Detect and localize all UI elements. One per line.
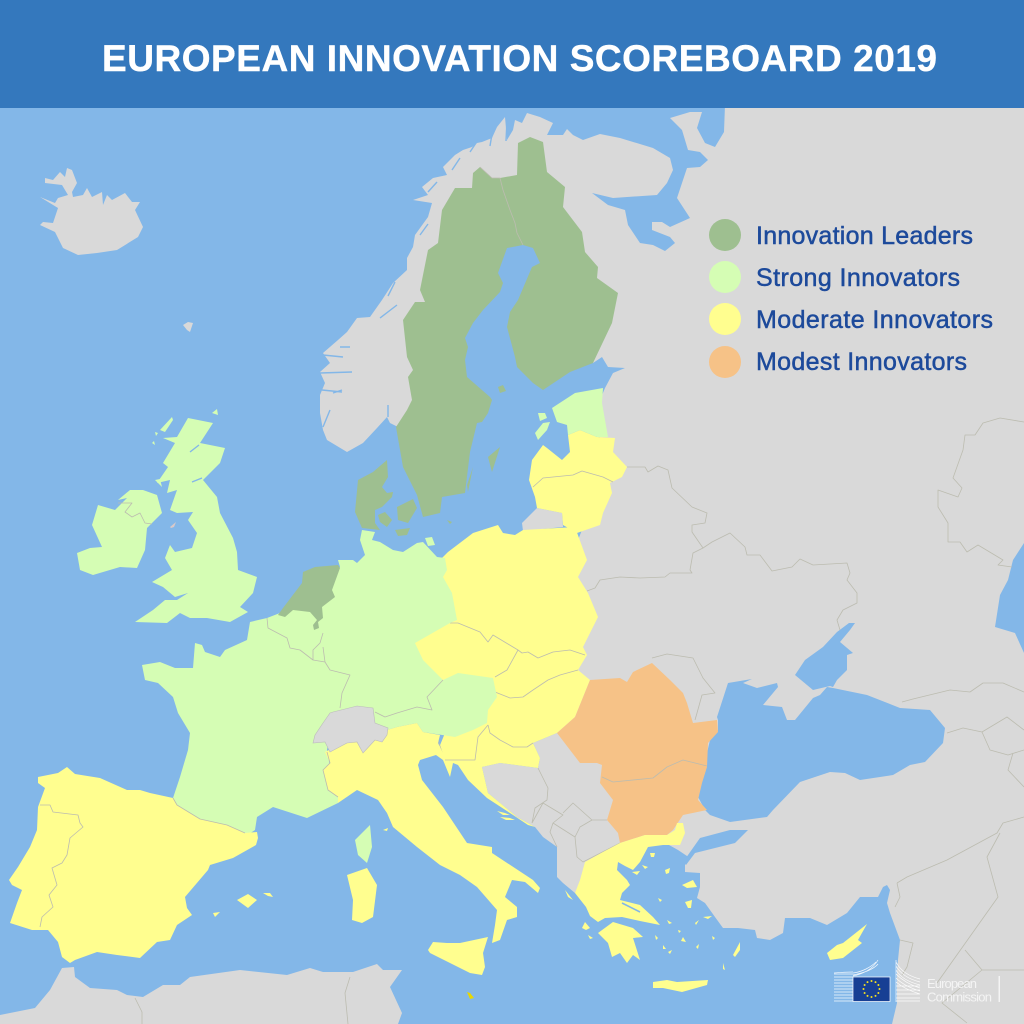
logo: vertical bar (998, 976, 1000, 1002)
Modest Innovators: Romania and Bulgaria (557, 663, 718, 843)
Central Europe yellow: Poland, Czechia, Slovakia, Hungary, Slovenia, Croatia (410, 525, 598, 827)
Baltic states: Latvia and Lithuania (529, 430, 627, 533)
Iceland (40, 168, 143, 255)
Italy (323, 723, 540, 975)
Ireland (77, 490, 162, 575)
Iberian Peninsula: Spain and Portugal (9, 767, 273, 963)
legend item: Innovation Leaders: Innovation Leaders (756, 222, 973, 250)
Greece (565, 823, 740, 992)
Sea of Marmara (683, 830, 748, 865)
Kaliningrad (522, 508, 563, 531)
Innovation Leaders: Netherlands (278, 565, 340, 630)
logo: wordmark: European (927, 976, 977, 991)
Black Sea (697, 679, 945, 822)
Sardinia (347, 868, 377, 923)
Oland (467, 467, 473, 492)
Cyprus (827, 924, 867, 960)
logo: right building lines (896, 960, 920, 1002)
Sicily (428, 937, 488, 975)
logo: left building lines (834, 960, 878, 1001)
logo: EU flag (853, 977, 890, 1002)
legend item: Moderate Innovators: Moderate Innovators (756, 306, 993, 334)
logo: wordmark: Commission (927, 990, 992, 1004)
Innovation Leaders: Finland (480, 137, 618, 393)
Gotland (488, 447, 500, 472)
Peloponnese (598, 922, 643, 963)
Isle of Man (170, 522, 176, 528)
Innovation Leaders: Denmark (355, 460, 452, 536)
Aegean and Ionian islands (565, 853, 740, 970)
legend item: Modest Innovators: Modest Innovators (756, 348, 967, 376)
North Africa (0, 964, 402, 1024)
Innovation Leaders: Sweden (396, 167, 523, 517)
Crete (653, 980, 708, 992)
Elba (383, 828, 388, 831)
header band (0, 0, 1024, 108)
Sea of Azov (795, 623, 855, 690)
title: EUROPEAN INNOVATION SCOREBOARD 2019 (102, 38, 937, 79)
non-member land: Norway, Russia, Eastern Europe, Balkans, Turkey, Middle East (320, 105, 1024, 1024)
legend (709, 219, 993, 378)
land outline borders in the east (532, 418, 1024, 1023)
Malta (467, 992, 474, 999)
Balearic Islands (213, 893, 273, 917)
Switzerland (313, 706, 388, 753)
Corsica (355, 825, 372, 863)
Norwegian fjords (320, 120, 507, 427)
legend item: Strong Innovators: Strong Innovators (756, 264, 960, 292)
Great Britain (135, 409, 257, 623)
Strong Innovators: France, Belgium, Luxembourg, Germany, Austria (142, 530, 497, 840)
Estonia (535, 388, 608, 440)
Caspian Sea (995, 543, 1024, 653)
European Commission logo (834, 960, 1000, 1004)
Faroe Islands (183, 322, 193, 332)
